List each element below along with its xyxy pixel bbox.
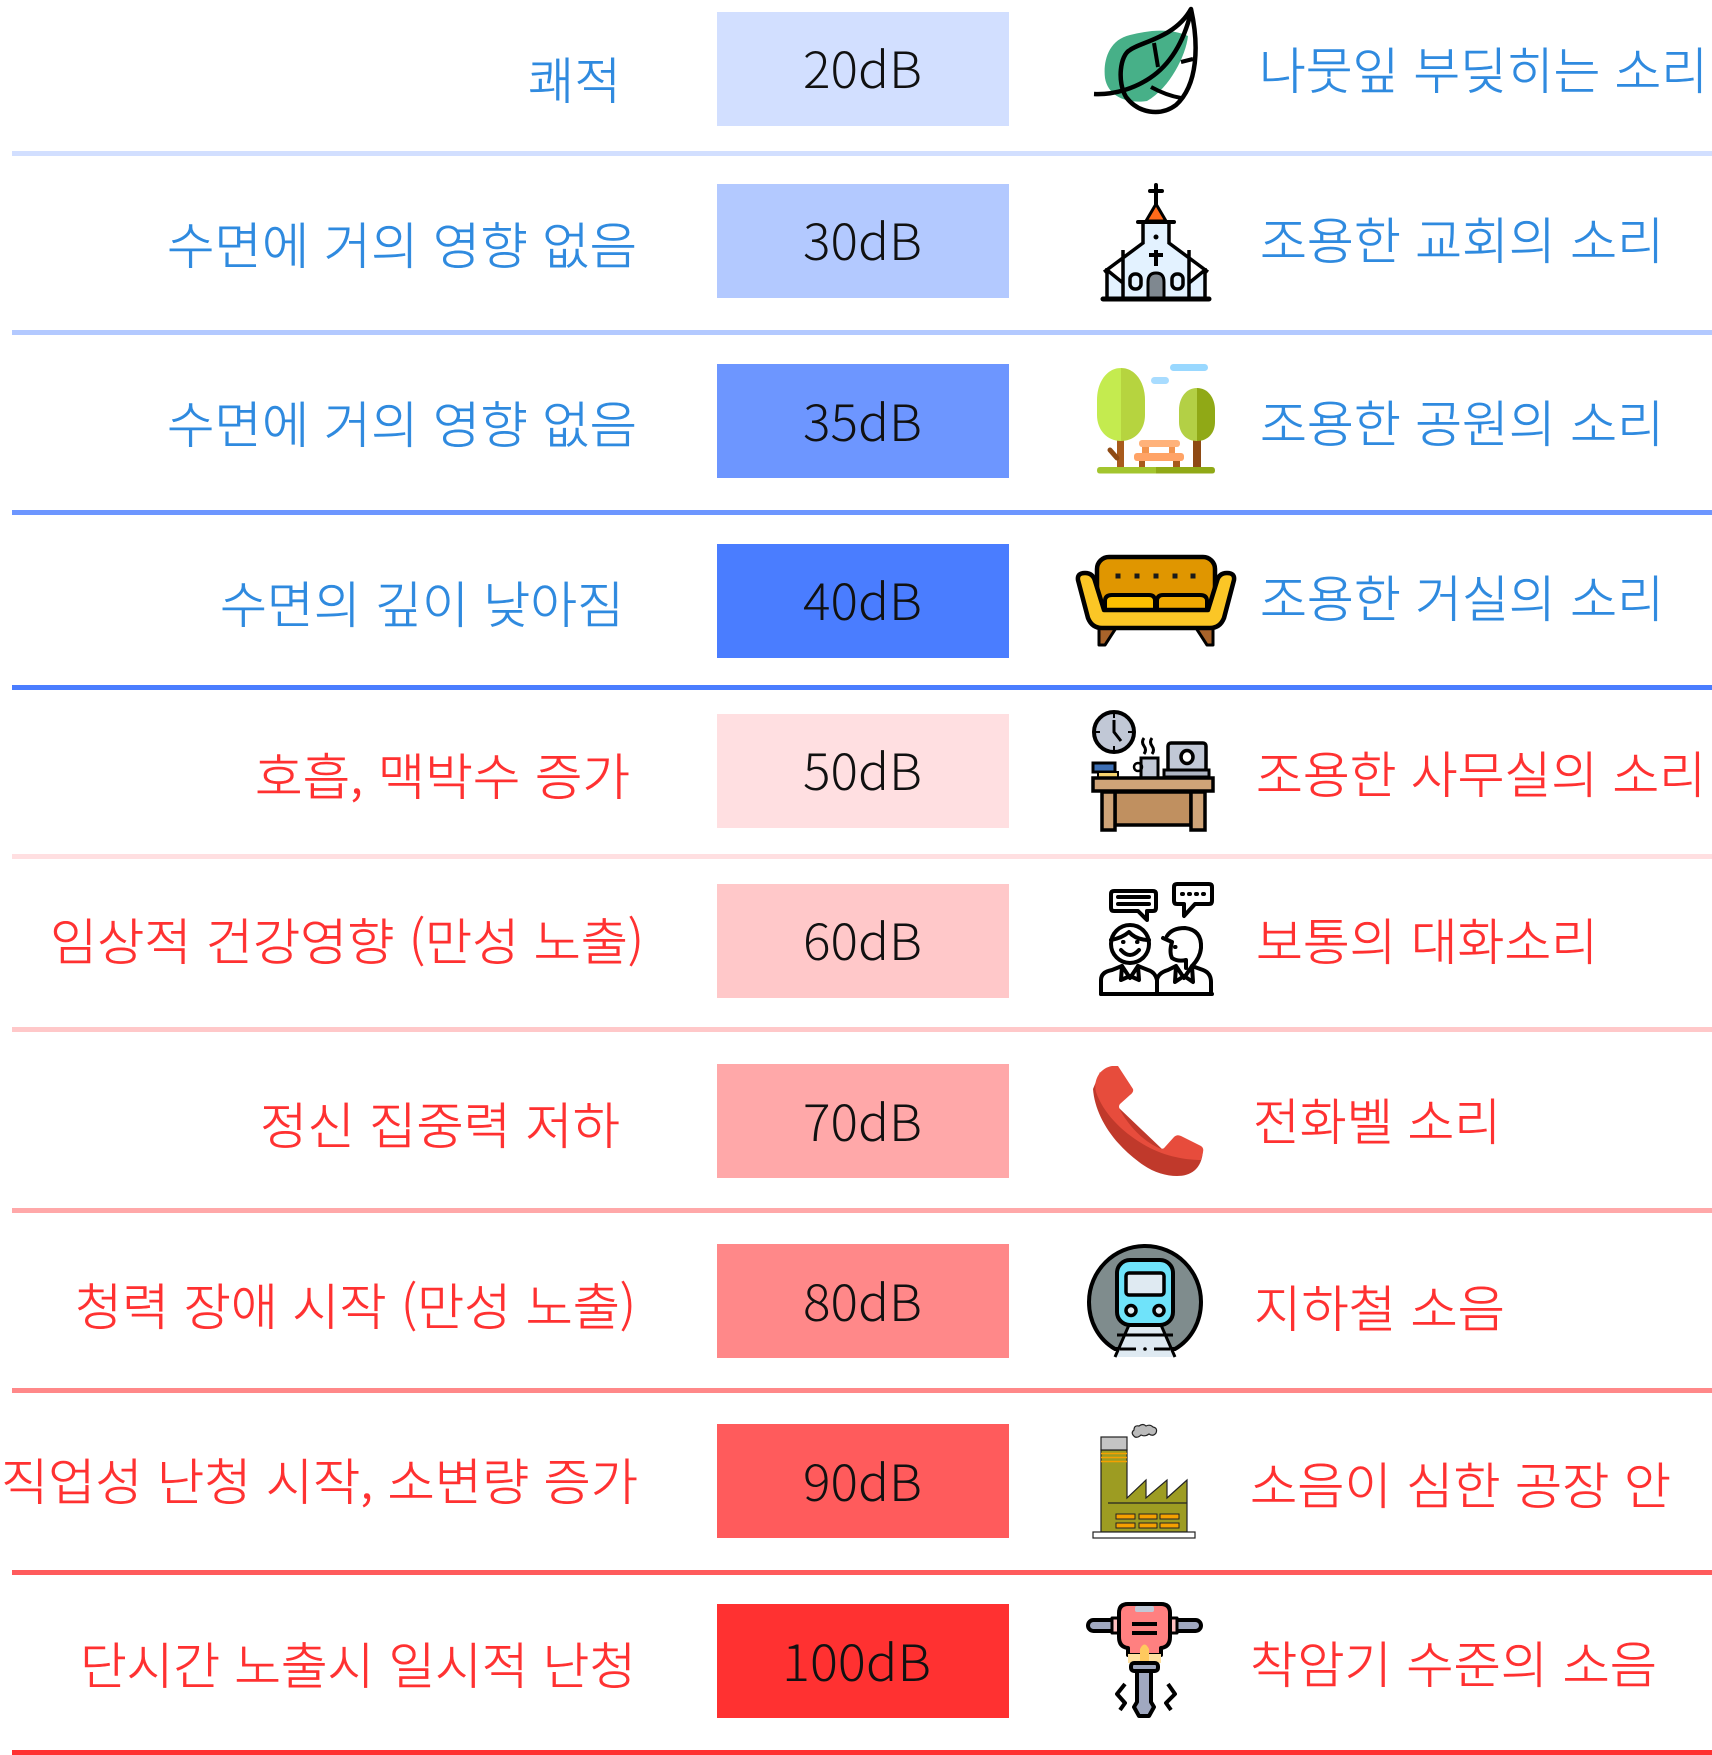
row: 35dB xyxy=(167,364,1664,478)
level box: 70dB: 70dB xyxy=(803,1084,922,1156)
level box: 40dB xyxy=(717,544,1009,658)
row: 90dB xyxy=(1,1424,1671,1538)
source text: 조용한 사무실의 소리 xyxy=(1256,736,1706,808)
source text: 지하철 소음 xyxy=(1254,1270,1505,1342)
level box: 80dB: 80dB xyxy=(803,1264,922,1336)
source text: 나뭇잎 부딪히는 소리 xyxy=(1259,32,1708,104)
source text: 보통의 대화소리 xyxy=(1256,903,1598,975)
effect text: 수면에 거의 영향 없음 xyxy=(167,207,637,279)
effect text: 쾌적: 쾌적 xyxy=(528,42,621,114)
effect text: 호흡, 맥박수 증가 xyxy=(255,738,630,810)
level box: 60dB xyxy=(717,884,1009,998)
icon: factory xyxy=(1093,1424,1195,1538)
source text: 착암기 수준의 소음 xyxy=(1250,1626,1657,1698)
row: 40dB xyxy=(220,544,1664,658)
source text: 전화벨 소리 xyxy=(1253,1083,1501,1155)
row: 50dB xyxy=(255,712,1706,830)
effect text: 임상적 건강영향 (만성 노출) xyxy=(50,903,644,975)
icon: telephone xyxy=(1093,1066,1203,1176)
level box: 80dB xyxy=(717,1244,1009,1358)
row: 30dB xyxy=(167,184,1664,299)
row: 20dB xyxy=(528,9,1708,126)
effect text: 단시간 노출시 일시적 난청 xyxy=(80,1627,636,1699)
level box: 30dB: 30dB xyxy=(803,203,922,275)
effect text: 정신 집중력 저하 xyxy=(260,1087,620,1159)
source text: 조용한 교회의 소리 xyxy=(1260,202,1664,274)
effect text: 수면의 깊이 낮아짐 xyxy=(220,566,624,638)
source text: 조용한 거실의 소리 xyxy=(1260,560,1664,632)
row: 70dB xyxy=(260,1064,1501,1178)
level box: 50dB xyxy=(717,714,1009,828)
icon: two people talking xyxy=(1101,884,1212,994)
icon: church xyxy=(1103,185,1209,299)
row: 80dB xyxy=(75,1244,1505,1358)
icon: office desk xyxy=(1093,712,1213,830)
icon: subway train xyxy=(1089,1246,1201,1357)
icon: park xyxy=(1097,364,1215,474)
level box: 35dB: 35dB xyxy=(803,384,922,456)
effect text: 직업성 난청 시작, 소변량 증가 xyxy=(1,1443,638,1515)
level box: 100dB: 100dB xyxy=(782,1624,931,1696)
level box: 30dB xyxy=(717,184,1009,298)
level box: 70dB xyxy=(717,1064,1009,1178)
icon: sofa xyxy=(1078,557,1234,645)
row: 100dB xyxy=(80,1604,1657,1718)
level box: 60dB: 60dB xyxy=(803,903,922,975)
level box: 100dB xyxy=(717,1604,1009,1718)
level box: 90dB: 90dB xyxy=(803,1444,922,1516)
level box: 90dB xyxy=(717,1424,1009,1538)
effect text: 청력 장애 시작 (만성 노출) xyxy=(75,1268,636,1340)
level box: 20dB: 20dB xyxy=(803,31,922,103)
icon: jackhammer xyxy=(1088,1604,1201,1716)
level box: 50dB: 50dB xyxy=(803,733,922,805)
effect text: 수면에 거의 영향 없음 xyxy=(167,386,637,458)
row: 60dB xyxy=(50,884,1598,998)
source text: 소음이 심한 공장 안 xyxy=(1250,1447,1671,1519)
level box: 20dB xyxy=(717,12,1009,126)
icon: leaf xyxy=(1094,9,1196,112)
source text: 조용한 공원의 소리 xyxy=(1260,385,1664,457)
level box: 40dB: 40dB xyxy=(803,563,922,635)
level box: 35dB xyxy=(717,364,1009,478)
